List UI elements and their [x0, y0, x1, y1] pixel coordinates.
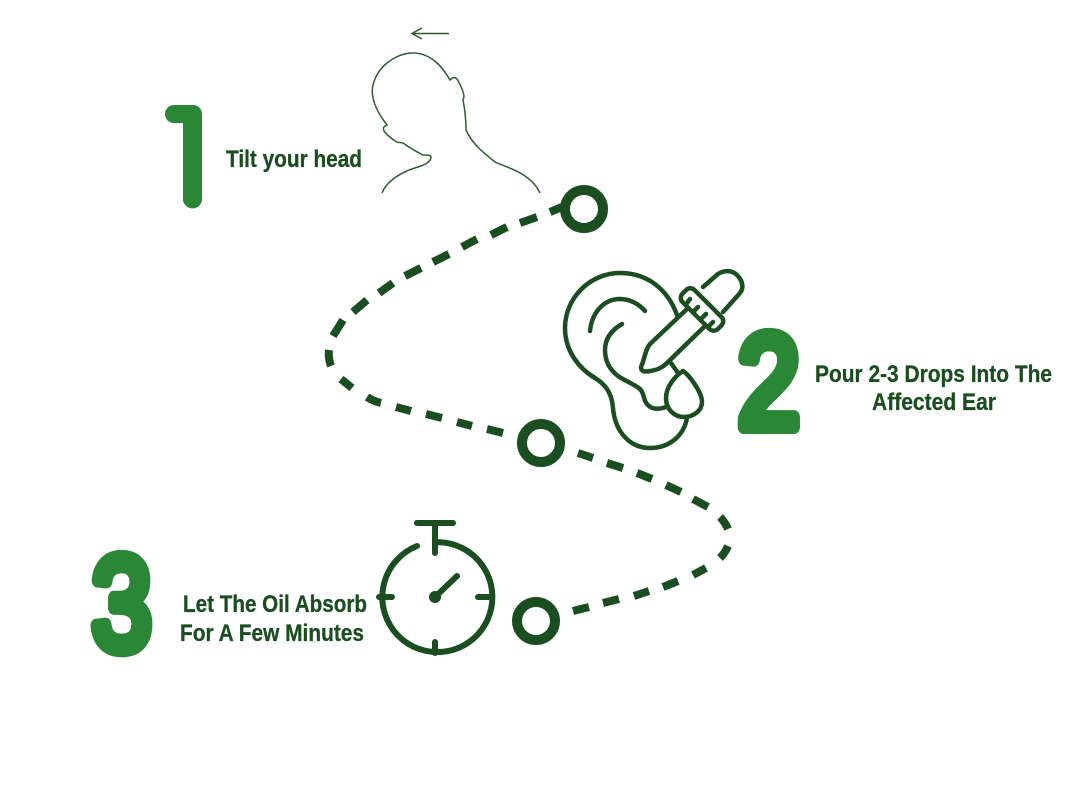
icon: head outline: [372, 53, 540, 193]
numeral 1: 1: [142, 83, 217, 232]
numeral 2: 2: [738, 308, 800, 455]
step 2 label: [815, 361, 1052, 416]
dashed route from step 1 to step 2: [329, 207, 562, 433]
step 1 label: Tilt your head: [226, 146, 362, 173]
numeral 3: 3: [92, 530, 151, 678]
step 2 label: Affected Ear: [872, 389, 996, 416]
dashed route from step 2 to step 3: [573, 453, 728, 611]
route marker 3: [517, 602, 555, 640]
step 3 label: For A Few Minutes: [180, 620, 364, 647]
step 2 label: Pour 2-3 Drops Into The: [815, 361, 1052, 388]
route marker 2: [522, 424, 560, 462]
step 3 label: Let The Oil Absorb: [183, 591, 367, 618]
icon: ear with dropper: [565, 271, 742, 448]
route marker 1: [565, 190, 603, 228]
icon: stopwatch: [379, 523, 492, 653]
step 3 label: [180, 591, 367, 647]
icon: direction arrow: [412, 28, 449, 39]
